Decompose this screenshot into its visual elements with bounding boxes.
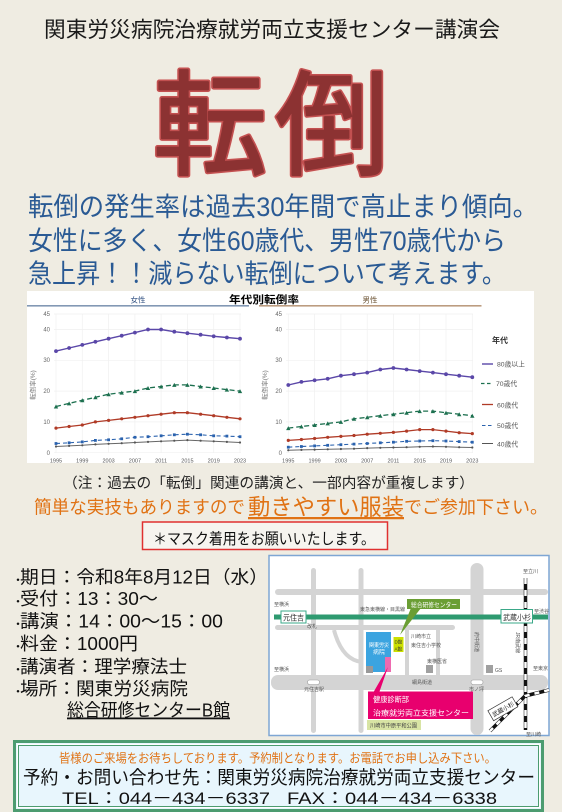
chart legend: 60歳代 xyxy=(497,400,518,410)
map labels: 至横浜 xyxy=(274,601,289,608)
chart panel: fall rate by age group xyxy=(27,291,534,464)
men line chart: 2023 xyxy=(466,458,478,464)
intro paragraph: 女性に多く、女性60歳代、男性70歳代から xyxy=(28,226,506,256)
map labels: 市ノ坪 xyxy=(469,686,484,693)
men line chart: 2003 xyxy=(335,458,347,464)
reservation notice: 皆様のご来場をお待ちしております。予約制となります。お電話でお申し込み下さい。 xyxy=(59,750,496,766)
label: training center xyxy=(400,599,460,635)
women line chart: 2007 xyxy=(129,458,141,464)
facet header: women: 女性 xyxy=(130,294,146,304)
men 70s xyxy=(288,411,472,428)
reception time: 受付：13：30～ xyxy=(20,589,158,609)
men 80 and over xyxy=(288,368,472,385)
magenta callout: health checkup and support center: 健康診断部 xyxy=(373,694,409,704)
hospital building xyxy=(366,632,391,673)
lecture time: ・ xyxy=(13,620,23,630)
date: ・ xyxy=(13,576,23,586)
small grey blocks xyxy=(426,665,493,673)
map labels: 至東京 xyxy=(533,665,548,672)
venue: 場所：関東労災病院 xyxy=(20,679,188,699)
orange call to action xyxy=(34,495,548,520)
label: training center: 総合研修センター xyxy=(411,600,457,609)
main title: 転倒 xyxy=(153,64,389,191)
header: lecture series name: 関東労災病院治療就労両立支援センター講演会 xyxy=(44,18,500,42)
men line chart: 40 xyxy=(275,328,283,334)
buildings D and A: D館 xyxy=(394,638,403,646)
men 40s xyxy=(288,446,472,450)
men line chart: 1995 xyxy=(282,458,294,464)
map labels: 至渋谷 xyxy=(534,608,549,615)
JR railway line xyxy=(490,578,549,731)
venue building: 総合研修センターB館 xyxy=(67,700,230,720)
men line chart: 2007 xyxy=(361,458,373,464)
women line chart: 2023 xyxy=(234,458,246,464)
green rail line xyxy=(274,614,548,620)
men line chart xyxy=(261,312,478,464)
reception time: ・ xyxy=(13,597,23,608)
map labels xyxy=(274,568,549,738)
women line chart: 40 xyxy=(43,328,51,334)
date: 期日：令和8年8月12日（水） xyxy=(20,568,268,588)
magenta callout: health checkup and support center: 治療就労両立支援センター xyxy=(373,708,469,718)
map labels: 至川崎 xyxy=(526,731,541,738)
women line chart: 30 xyxy=(43,358,51,364)
women line chart: 0 xyxy=(47,451,51,457)
women 80 and over xyxy=(56,330,240,351)
orange call to action: でご参加下さい。 xyxy=(404,498,548,518)
station: Motosumiyoshi: 元住吉 xyxy=(283,612,304,622)
map labels: 元住吉駅 xyxy=(304,686,324,693)
magenta callout: health checkup and support center xyxy=(368,667,473,719)
facet header: men: 男性 xyxy=(362,294,378,304)
map labels: 至立川 xyxy=(523,568,538,575)
map labels: 東急東横線・目黒線 xyxy=(360,606,405,613)
men 60s xyxy=(288,430,472,440)
men line chart: 0 xyxy=(279,451,283,457)
fax: FAX：044－434－6338 xyxy=(287,789,497,808)
contact heading: 予約・お問い合わせ先：関東労災病院治療就労両立支援センター xyxy=(23,767,535,788)
roads xyxy=(271,563,548,735)
map labels: 綱島街道 xyxy=(412,679,432,686)
women 60s xyxy=(56,413,240,428)
Musashi-Kosugi sign xyxy=(488,697,518,721)
women line chart xyxy=(29,312,246,464)
lecture time: 講演：14：00～15：00 xyxy=(20,612,223,632)
venue: ・ xyxy=(13,687,23,698)
women line chart: 20 xyxy=(43,389,51,395)
buildings D and A xyxy=(394,637,404,652)
women line chart: 45 xyxy=(43,312,51,318)
map labels: JR南武線 xyxy=(514,632,521,653)
chart legend: 40歳代 xyxy=(497,440,518,448)
map labels: 東住吉小学校 xyxy=(411,642,441,649)
contact panel xyxy=(14,742,542,810)
map labels: 改札 xyxy=(307,623,317,630)
women line chart: 2019 xyxy=(208,458,220,464)
lecturer: 講演者：理学療法士 xyxy=(20,657,187,677)
map labels: 至横浜 xyxy=(274,666,289,673)
intro paragraph xyxy=(28,192,538,289)
traffic signals xyxy=(308,680,483,684)
women line chart: 転倒率(%) xyxy=(29,370,37,400)
map labels: 府中街道 xyxy=(473,632,480,652)
park label: 川崎市中原平和公園 xyxy=(370,722,417,730)
map labels: GS xyxy=(495,668,503,674)
access map xyxy=(269,556,549,738)
intro paragraph: 急上昇！！減らない転倒について考えます。 xyxy=(28,259,506,289)
men line chart: 2015 xyxy=(414,458,426,464)
mask notice box: ＊マスク着用をお願いいたします。 xyxy=(153,530,375,548)
women line chart: 2003 xyxy=(102,458,115,464)
chart legend: 70歳代 xyxy=(496,379,517,388)
women 50s xyxy=(56,434,240,444)
men line chart: 10 xyxy=(275,420,283,426)
event details list xyxy=(13,568,268,720)
women line chart: 1995 xyxy=(50,458,62,464)
chart legend: 50歳代 xyxy=(497,421,518,430)
lecturer: ・ xyxy=(13,665,23,676)
chart legend: 80歳以上 xyxy=(497,360,525,368)
orange call to action: 簡単な実技もありますので xyxy=(34,498,245,518)
telephone: TEL：044－434－6337 xyxy=(62,789,270,808)
hospital building: 関東労災 xyxy=(369,641,389,649)
men line chart: 2019 xyxy=(440,458,452,464)
map labels: 東横医省 xyxy=(427,658,447,665)
chart legend: 年代 xyxy=(492,335,508,345)
men line chart: 30 xyxy=(275,358,283,364)
Musashi-Kosugi sign: 武蔵小杉 xyxy=(491,700,516,719)
men line chart: 45 xyxy=(275,312,283,318)
park label xyxy=(367,720,421,730)
main title: 転倒 xyxy=(153,64,389,191)
women line chart: 10 xyxy=(43,420,51,426)
station: Musashi-Kosugi: 武蔵小杉 xyxy=(503,612,531,622)
chart title: 年代別転倒率 xyxy=(229,293,300,306)
women line chart: 2015 xyxy=(181,458,194,464)
men line chart: 2011 xyxy=(387,458,399,464)
fee: 料金：1000円 xyxy=(20,634,138,654)
women line chart: 2011 xyxy=(155,458,167,464)
chart legend xyxy=(481,335,525,448)
intro paragraph: 転倒の発生率は過去30年間で高止まり傾向。 xyxy=(28,192,538,222)
hospital building: 病院 xyxy=(373,648,386,656)
mask notice box xyxy=(142,522,388,550)
map labels: 川崎市立 xyxy=(411,633,431,640)
note about overlapping content: （注：過去の「転倒」関連の講演と、一部内容が重複します） xyxy=(63,475,474,492)
fee: ・ xyxy=(13,642,23,653)
men 50s xyxy=(288,441,472,447)
women 70s xyxy=(56,385,240,406)
buildings D and A: A館 xyxy=(394,646,403,652)
men line chart: 転倒率(%) xyxy=(261,370,269,400)
main title: 転倒 xyxy=(153,64,389,191)
orange call to action: 動きやすい服装 xyxy=(248,495,404,520)
men line chart: 1999 xyxy=(308,458,321,464)
men line chart: 20 xyxy=(275,389,283,395)
women line chart: 1999 xyxy=(76,458,88,464)
station: Musashi-Kosugi xyxy=(501,610,532,623)
women 40s xyxy=(56,440,240,446)
station: Motosumiyoshi xyxy=(281,611,306,623)
